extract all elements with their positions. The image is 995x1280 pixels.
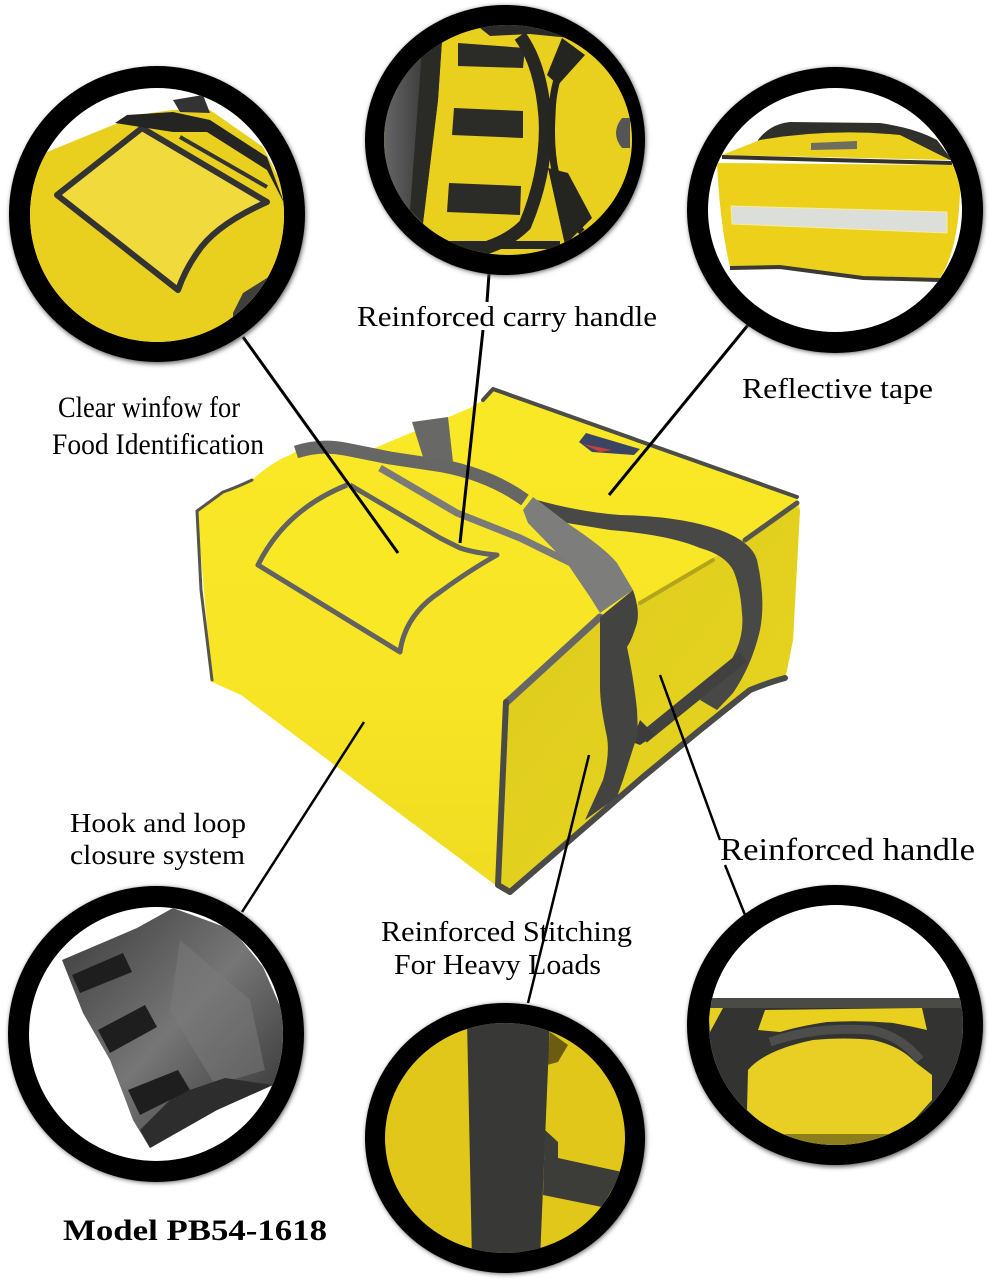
ring shadow (366, 1004, 646, 1274)
label: reinforced handle: Reinforced handle (720, 831, 975, 867)
label: reinforced stitching (381, 917, 632, 981)
ring shadow (688, 68, 984, 354)
label: clear window: Food Identification (52, 428, 264, 461)
velcro strips (458, 43, 525, 68)
reflective strip (731, 206, 947, 233)
clear window flap (258, 485, 497, 652)
label: closure system: closure system (70, 840, 245, 870)
ring shadow (9, 887, 305, 1183)
bag right side face (498, 505, 800, 895)
label: reinforced stitching: Reinforced Stitching (381, 917, 632, 948)
label: model number: Model PB54-1618 (63, 1214, 327, 1247)
bag piping edges (197, 389, 797, 892)
ring shadow (688, 887, 984, 1167)
label: closure system: Hook and loop (70, 808, 246, 838)
thin carry strap (380, 468, 575, 565)
photo: liner close-up (62, 908, 283, 1148)
ring (9, 66, 305, 362)
ring (365, 1003, 645, 1273)
label: reinforced stitching: For Heavy Loads (394, 950, 601, 981)
callout leader lines (242, 274, 748, 1003)
brand badge (579, 433, 640, 455)
label: clear window (52, 391, 264, 461)
ring (365, 5, 645, 275)
right side handle loop (537, 500, 762, 745)
circle detail: clear window (9, 66, 306, 364)
label: closure system (70, 808, 246, 870)
ring shadow (366, 6, 646, 276)
upper carry strap (296, 447, 525, 500)
bag front and top face (197, 388, 800, 895)
photo: tape close-up (717, 122, 960, 280)
ring (687, 67, 983, 353)
circle detail: reflective tape (687, 67, 984, 354)
carry strap back stub (412, 417, 453, 462)
wide carry strap (523, 497, 633, 613)
circle detail: reinforced handle (687, 885, 984, 1167)
circle detail: reinforced stitching (365, 1003, 646, 1274)
photo: window close-up (25, 95, 295, 345)
label: reflective tape: Reflective tape (742, 373, 933, 405)
label: carry handle: Reinforced carry handle (357, 301, 657, 333)
label: clear window: Clear winfow for (58, 391, 240, 424)
ring shadow (10, 68, 306, 364)
main product: yellow pizza bag (197, 388, 800, 895)
ring (687, 885, 983, 1165)
velcro strips (72, 953, 132, 993)
front vertical strap (585, 590, 638, 820)
photo: strap close-up (467, 1020, 622, 1260)
ring (8, 886, 304, 1182)
circle detail: carry handle (365, 5, 646, 276)
photo: handle close-up (705, 998, 970, 1150)
circle detail: hook and loop closure (8, 886, 305, 1183)
photo: handle close-up (380, 20, 630, 260)
